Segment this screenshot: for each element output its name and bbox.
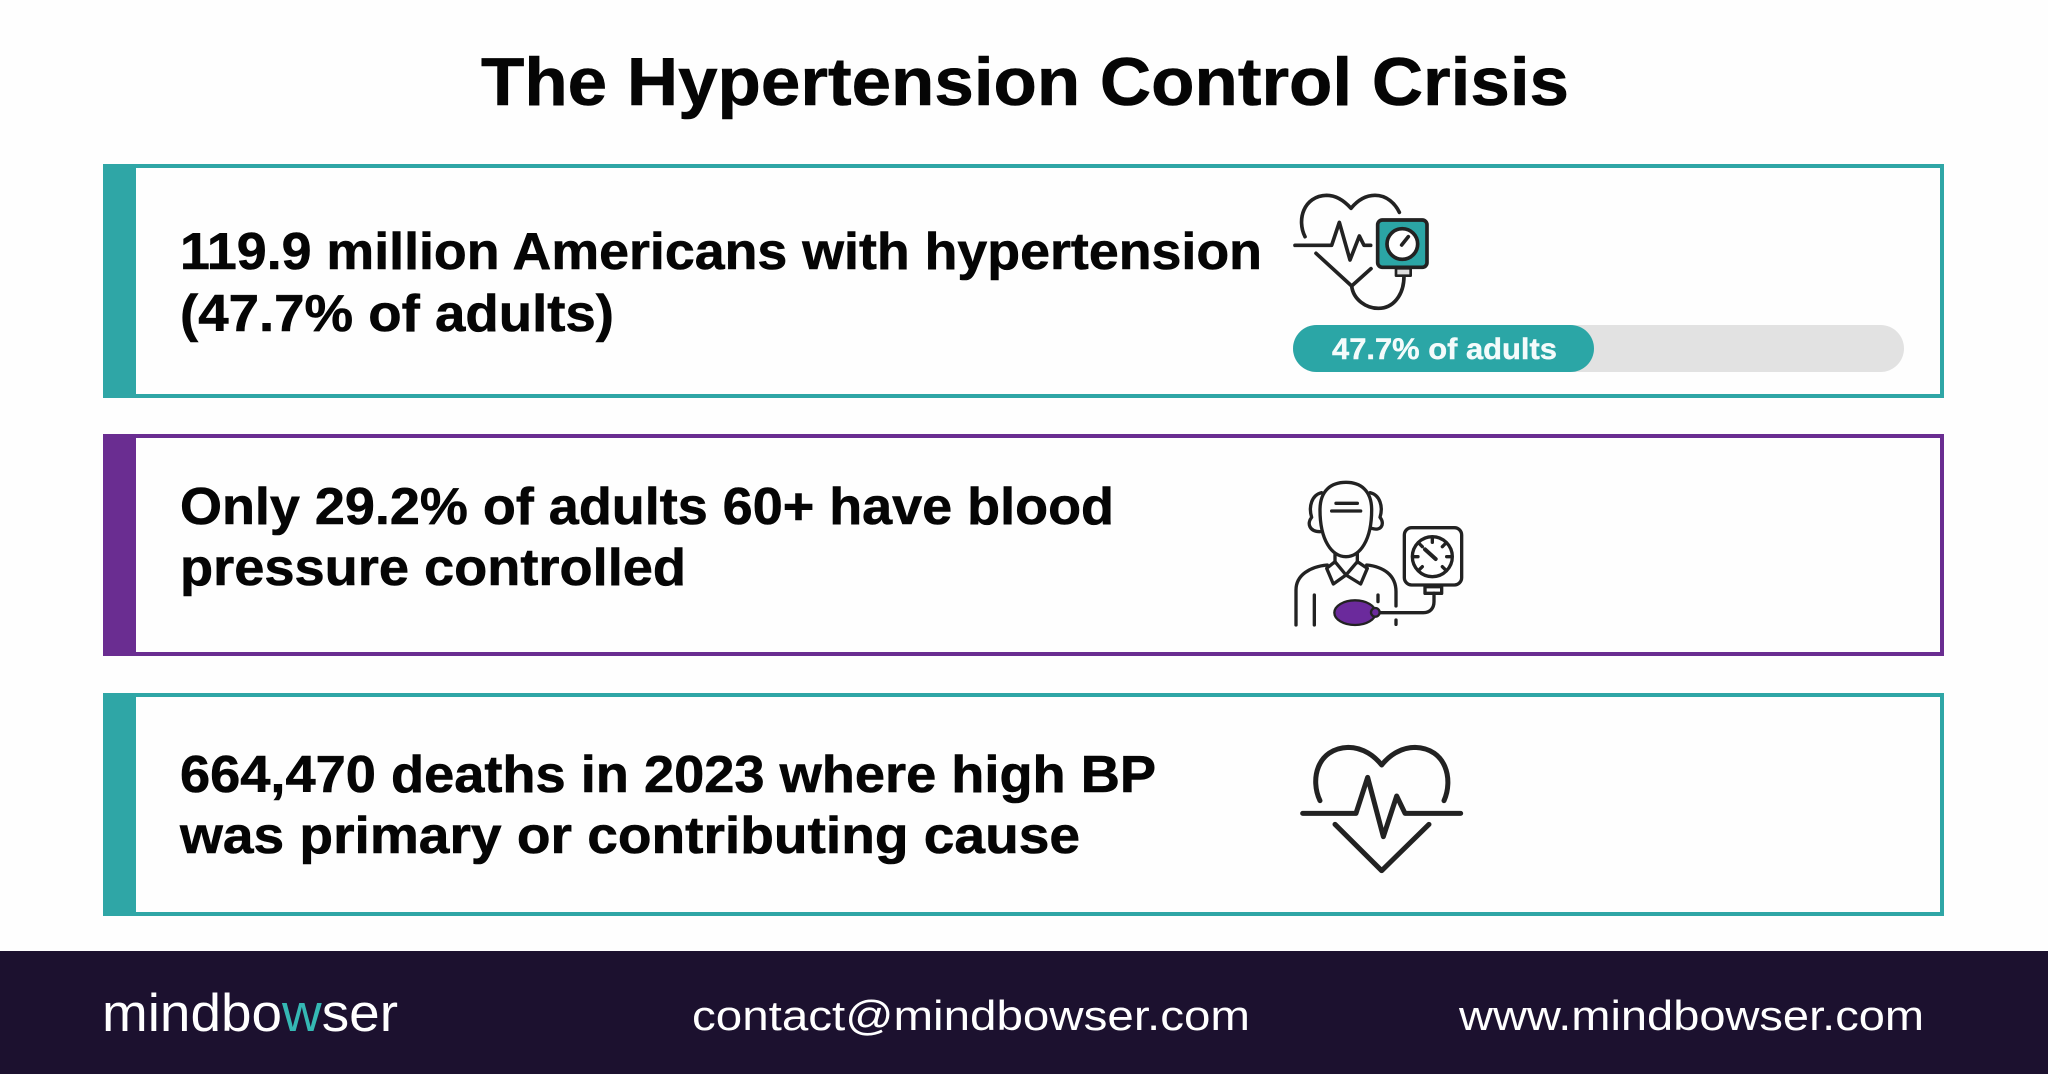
panel: hypertension prevalence [103,164,1942,398]
panel: blood pressure control in older adults [103,434,1942,656]
accent bar [103,693,136,916]
title: The Hypertension Control Crisis [481,44,1569,120]
icon: heart with pulse line [1303,747,1461,871]
statement text: was primary or contributing cause [179,807,1080,865]
panel: deaths from high blood pressure [103,693,1942,916]
statement text: pressure controlled [180,539,686,597]
statement text: (47.7% of adults) [180,285,614,343]
website: www.mindbowser.com [1458,992,1924,1039]
statement text: Only 29.2% of adults 60+ have blood [180,478,1114,536]
logo: mindbowser: mindbowser [102,984,398,1043]
icon: heart with blood pressure monitor [1295,195,1427,308]
contact email: contact@mindbowser.com [692,992,1250,1039]
statement text: 664,470 deaths in 2023 where high BP [180,746,1156,804]
icon: older man with blood pressure cuff [1296,482,1462,625]
progress bar: 47.7% of adults [1293,325,1904,372]
statement text: 119.9 million Americans with hypertension [180,223,1262,281]
accent bar [103,164,136,398]
accent bar [103,434,136,656]
footer band [0,951,2048,1074]
progress bar: 47.7% of adults: 47.7% of adults [1332,333,1557,366]
